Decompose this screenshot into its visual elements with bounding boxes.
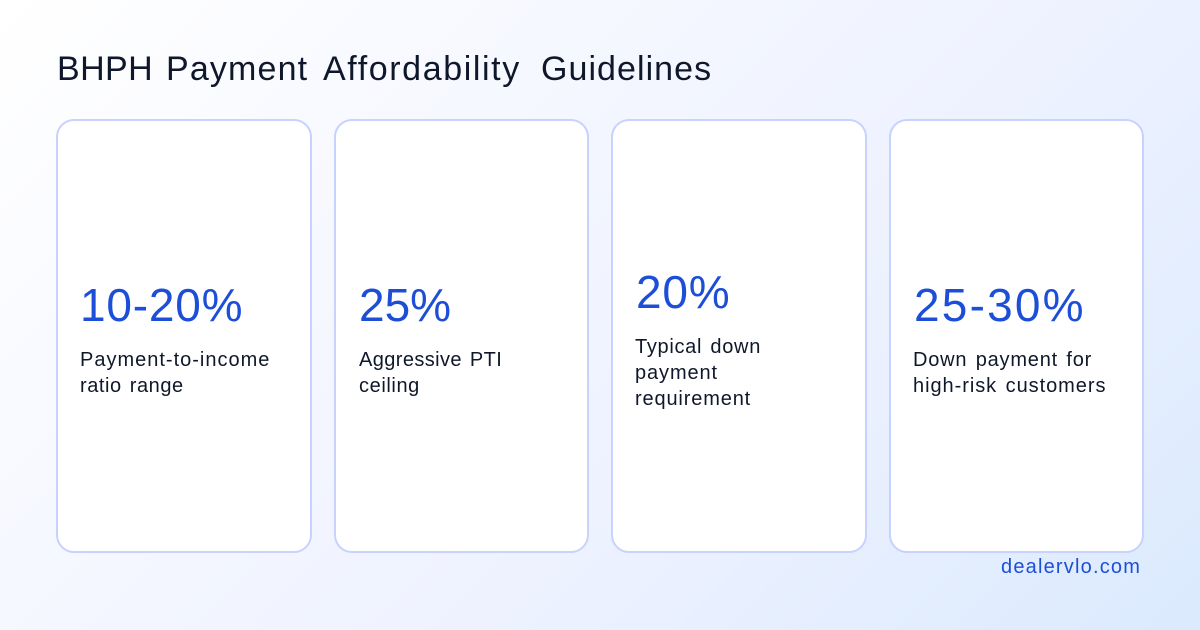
label: payment-to-income ratio range: ratio range	[80, 375, 184, 397]
label: down payment for high-risk customers: high-risk customers	[913, 375, 1106, 397]
panel: payment-to-income ratio	[56, 119, 312, 553]
stat: 20%: 20%	[636, 266, 730, 318]
label: aggressive PTI ceiling: ceiling	[359, 375, 420, 397]
label: typical down payment requirement: payment	[635, 362, 718, 384]
panel: aggressive PTI ceiling	[334, 119, 589, 553]
label: aggressive PTI ceiling: Aggressive PTI	[359, 349, 502, 371]
label: payment-to-income ratio range	[80, 349, 270, 397]
label: typical down payment requirement: requirement	[635, 388, 751, 410]
label: down payment for high-risk customers: Down payment for	[913, 349, 1092, 371]
stat: 10-20%: 10-20%	[80, 279, 243, 331]
title: Guidelines	[541, 50, 712, 88]
label: down payment for high-risk customers	[913, 349, 1106, 397]
footer brand: dealervlo.com	[1001, 556, 1141, 578]
title: Payment	[166, 50, 308, 88]
label: payment-to-income ratio range: Payment-to-income	[80, 349, 270, 371]
label: typical down payment requirement	[635, 336, 761, 410]
stat: 25-30%: 25-30%	[914, 279, 1086, 331]
title: BHPH	[57, 50, 153, 88]
label: aggressive PTI ceiling	[359, 349, 502, 397]
panel: typical down payment	[611, 119, 867, 553]
label: typical down payment requirement: Typical down	[635, 336, 761, 358]
title	[57, 50, 712, 88]
panel: high-risk down payment	[889, 119, 1144, 553]
title: Affordability	[323, 50, 521, 88]
stat: 25%: 25%	[359, 279, 451, 331]
